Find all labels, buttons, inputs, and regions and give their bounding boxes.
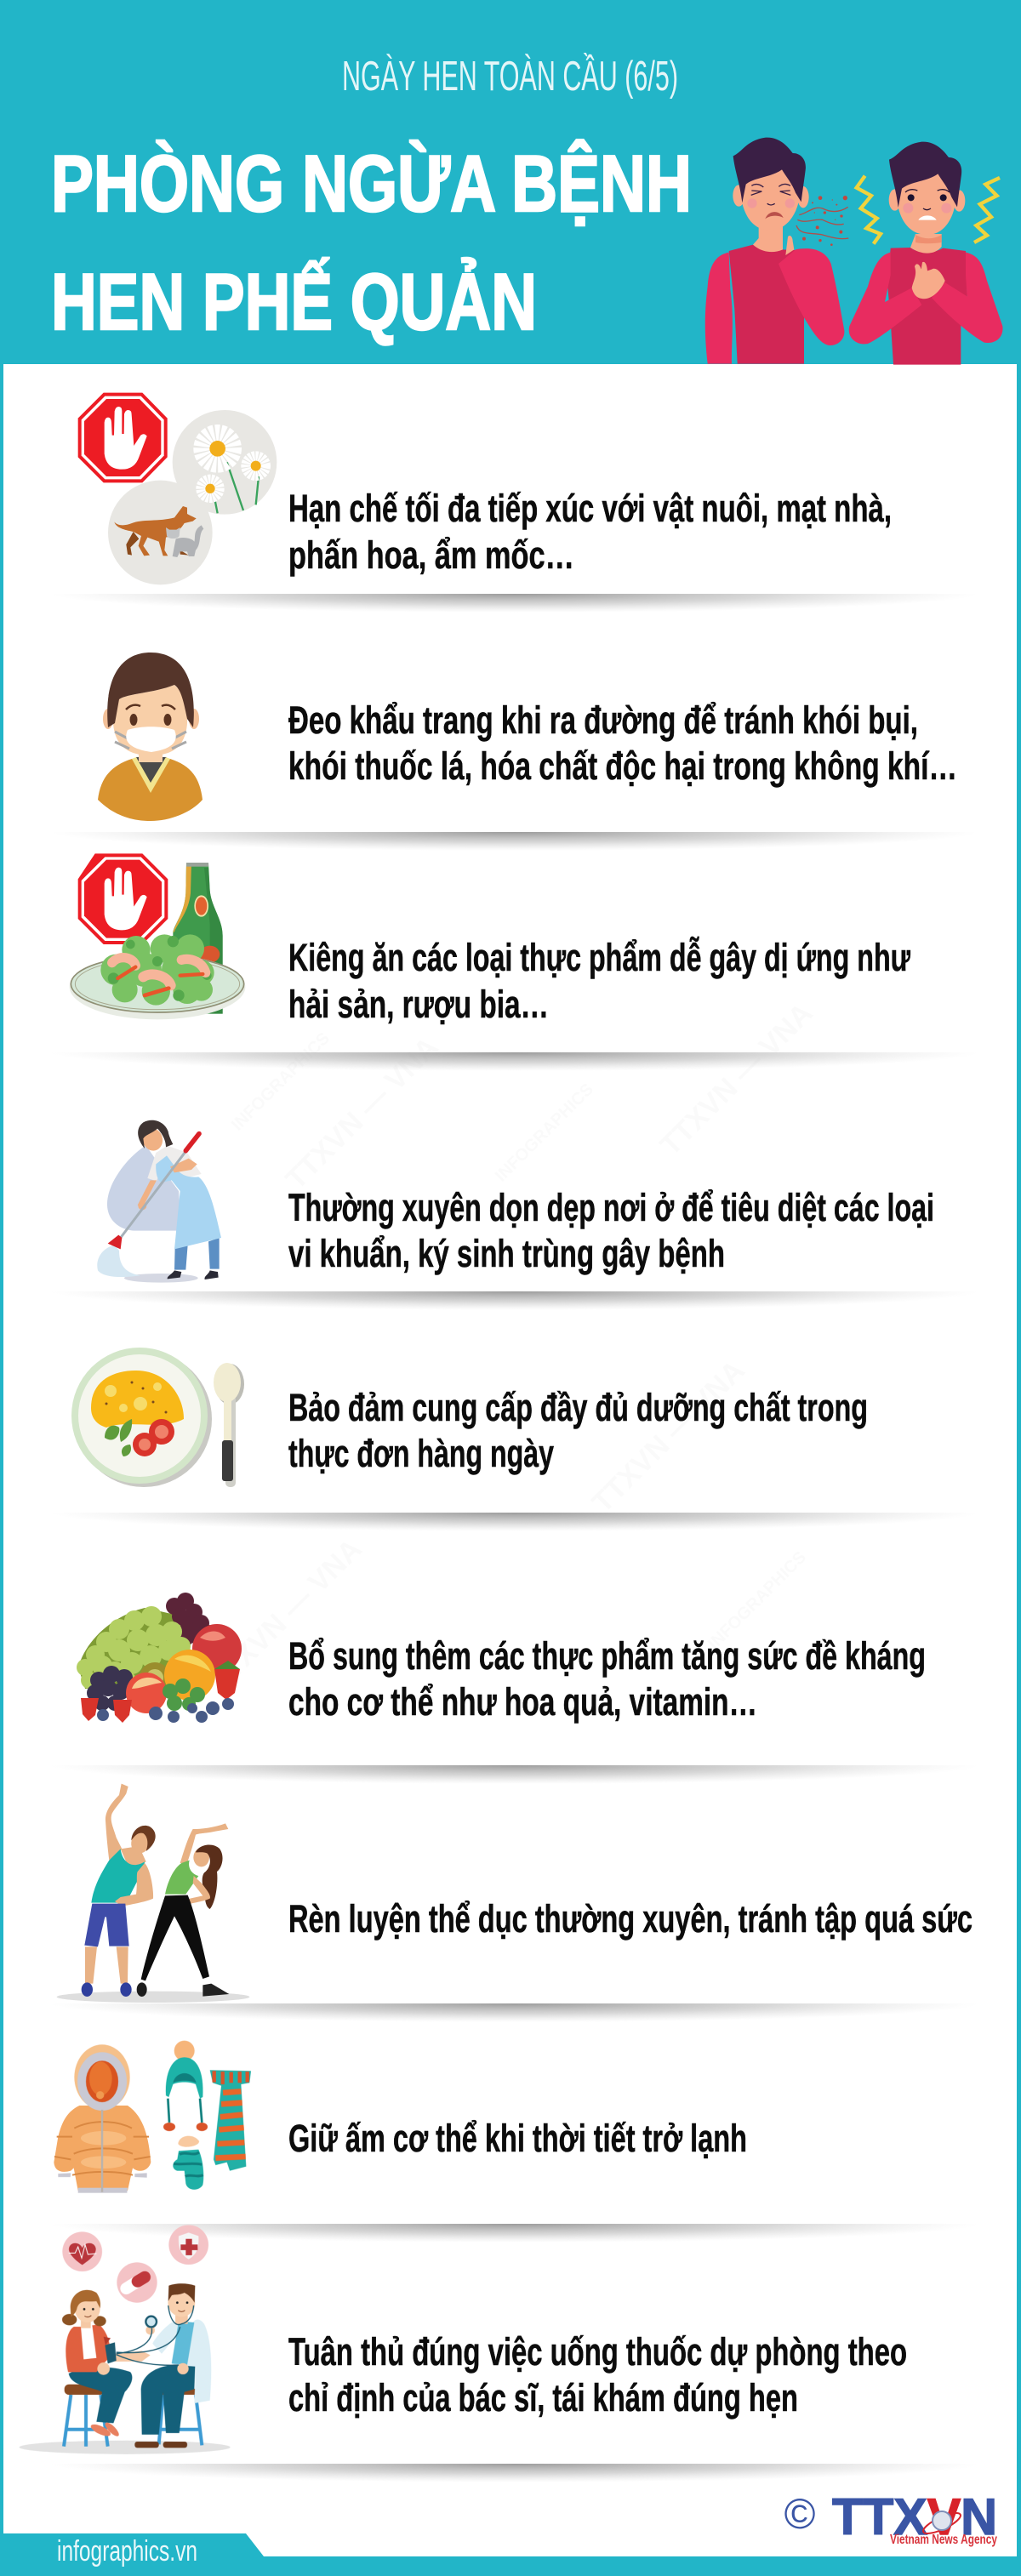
icon: two people with asthma symptoms [705, 138, 1003, 365]
text: item 4 [288, 1186, 934, 1275]
text: item 5: thực đơn hàng ngày [288, 1432, 554, 1475]
watermarks: INFOGRAPHICS [228, 1029, 334, 1135]
copyright mark: © [784, 2490, 816, 2538]
watermarks: INFOGRAPHICS [704, 1548, 810, 1654]
person clutching chest [849, 142, 1003, 365]
text: item 5 [288, 1386, 868, 1475]
text: item 1 [288, 487, 892, 577]
man stretching [82, 1784, 156, 1997]
knitted hat [163, 2041, 208, 2131]
watermarks: TTXVN — VNA [280, 1031, 445, 1196]
item 6: boost immunity [77, 1593, 926, 1724]
icon: two people stretching [57, 1784, 249, 2003]
item 5: adequate nutrition [71, 1348, 868, 1487]
text: item 3: hải sản, rượu bia… [288, 983, 549, 1026]
text: item 2 [288, 698, 957, 788]
item 9: follow prescription [20, 2225, 907, 2454]
globe emblem [921, 2510, 963, 2537]
text: item 8: Giữ ấm cơ thể khi thời tiết trở lạnh [288, 2117, 747, 2160]
text: item 9 [288, 2330, 907, 2419]
footer logo: copyright and TTXVN [784, 2488, 997, 2547]
text: item 9: chỉ định của bác sĩ, tái khám đúng hẹn [288, 2376, 798, 2419]
text: item 3 [288, 936, 910, 1026]
text: item 6: cho cơ thể như hoa quả, vitamin… [288, 1680, 757, 1724]
header title: PHÒNG NGỪA BỆNH [51, 139, 692, 228]
item 7: exercise [57, 1784, 973, 2003]
icon: person wearing mask [98, 653, 202, 821]
watermarks: TTXVN — VNA [586, 1354, 751, 1519]
watermarks: TTXVN — VNA [654, 997, 819, 1162]
mitten [173, 2136, 203, 2190]
icon: woman mopping [97, 1120, 221, 1283]
watermarks: TTXVN — VNA [203, 1533, 368, 1698]
item 1: limit allergen exposure [78, 393, 892, 584]
item 3: avoid allergenic food [70, 853, 910, 1026]
item 4: clean the home [97, 1120, 934, 1283]
icon: stop sign, flowers and pets [78, 393, 277, 584]
doctor stool [159, 2395, 202, 2445]
text: item 4: vi khuẩn, ký sinh trùng gây bệnh [288, 1232, 725, 1275]
patient [62, 2290, 151, 2438]
header title: HEN PHẾ QUẢN [51, 257, 537, 346]
striped scarf [210, 2070, 251, 2171]
icon: plate of food and spoon [71, 1348, 244, 1487]
puffer coat [54, 2044, 151, 2193]
item 2: wear a mask [98, 653, 957, 821]
woman stretching [137, 1823, 229, 1997]
health bubbles [62, 2225, 208, 2303]
patient stool [64, 2395, 108, 2447]
watermarks: INFOGRAPHICS [492, 1080, 597, 1186]
doctor [117, 2283, 211, 2448]
symptom zigzags [857, 176, 1000, 244]
text: item 1: phấn hoa, ẩm mốc… [288, 533, 574, 577]
header subtitle: NGÀY HEN TOÀN CẦU (6/5) [342, 54, 678, 100]
icon: doctor checking patient [20, 2225, 231, 2454]
footer website: infographics.vn [57, 2535, 197, 2567]
TTXVN wordmark: TTXVN [832, 2488, 997, 2545]
person coughing [705, 138, 848, 364]
icon: winter clothing [54, 2041, 251, 2193]
icon: stop sign, bottle and seafood salad [70, 853, 245, 1019]
text: item 6 [288, 1634, 926, 1724]
watermarks [203, 997, 819, 1698]
icon: fruit pile [77, 1593, 242, 1723]
footer tab [0, 2533, 1021, 2576]
header title [51, 139, 692, 346]
item 8: keep warm [54, 2041, 747, 2193]
